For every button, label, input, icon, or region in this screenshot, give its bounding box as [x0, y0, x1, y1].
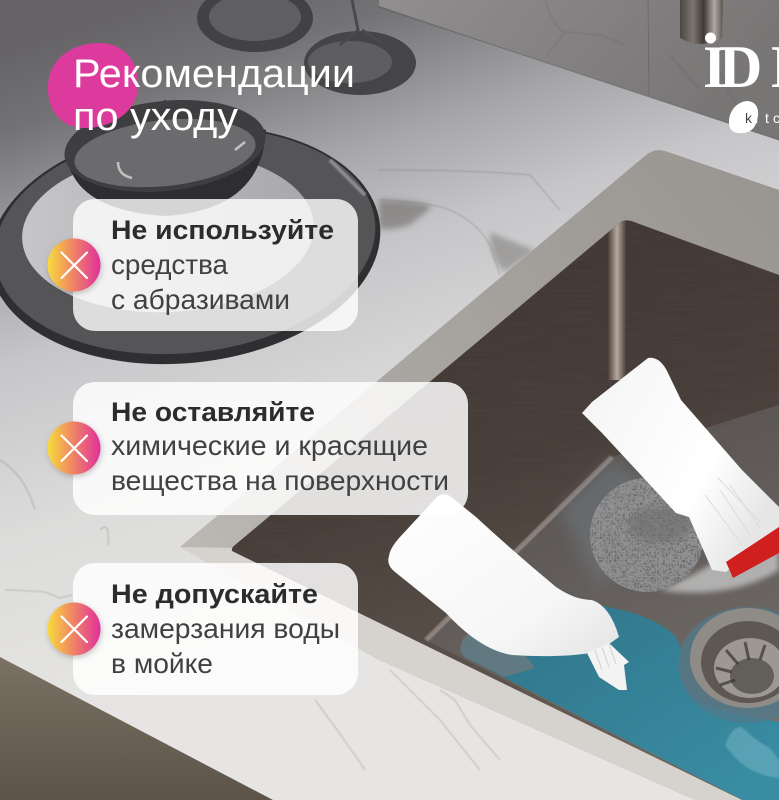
logo kitchen blob: k [745, 110, 753, 126]
backsplash wall [379, 0, 779, 140]
sink interior details [424, 220, 779, 800]
icon: cross 2 [48, 422, 100, 474]
title [73, 52, 355, 139]
card 3 body text: замерзания воды [111, 613, 340, 644]
dark glass bowl [60, 91, 270, 216]
water puddle [460, 605, 779, 800]
wine glass base left [197, 0, 313, 52]
card 2 heading: Не оставляйте [111, 397, 315, 427]
card 3 body text: в мойке [111, 648, 213, 679]
title: по уходу [73, 95, 238, 139]
panel: card 3 freezing [73, 563, 358, 695]
panel: card 1 abrasives [73, 199, 358, 331]
icon: cross 1 [48, 238, 100, 292]
card 1 heading: Не используйте [111, 215, 334, 245]
vertical corner crease [608, 220, 626, 380]
card 1 body text: средства [111, 249, 229, 280]
card 2 body text: химические и красящие [111, 430, 428, 461]
white bottle with red band [582, 358, 779, 578]
drain [678, 607, 779, 723]
white bottle with nozzle [388, 494, 629, 690]
card 1 body text: с абразивами [111, 284, 290, 315]
sink rim [180, 150, 779, 800]
sink bowl [232, 220, 779, 800]
logo kitchen blob [729, 101, 779, 133]
dark glass plate [0, 107, 392, 383]
card 2 body text: вещества на поверхности [111, 465, 449, 496]
title: Рекомендации [73, 52, 355, 96]
powder [661, 553, 779, 596]
panel: card 2 chemicals [73, 382, 468, 515]
wine glass base right [304, 0, 416, 95]
card 3 body text [111, 613, 340, 679]
card 2 body text [111, 430, 449, 496]
steel scouring pad [590, 478, 704, 592]
card 1 body text [111, 249, 290, 315]
faucet [680, 0, 723, 44]
light rim front [180, 547, 779, 800]
sink floor [426, 405, 779, 800]
cabinet front [0, 657, 273, 800]
pink blob [48, 43, 138, 128]
icon: cross 3 [48, 602, 100, 656]
card 3 heading: Не допускайте [111, 579, 318, 609]
logo [703, 32, 779, 133]
white plate [18, 144, 318, 320]
